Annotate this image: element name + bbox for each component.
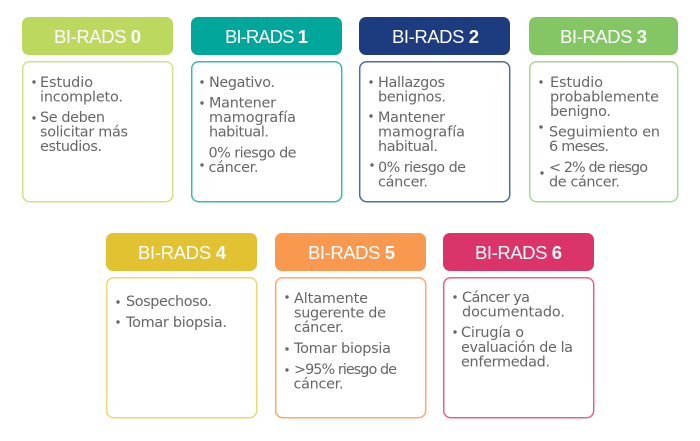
list: BI-RADS 1: mamografía (209, 110, 296, 126)
card: BI-RADS 0 (22, 17, 173, 202)
list: BI-RADS 3: Estudio (550, 75, 603, 91)
list: BI-RADS 6 (453, 290, 573, 370)
list: BI-RADS 3: probablemente (550, 90, 659, 106)
list: BI-RADS 1: Mantener (209, 96, 276, 112)
list: BI-RADS 0: Estudio (40, 75, 93, 91)
list: BI-RADS 1: habitual. (209, 124, 269, 140)
panel: BI-RADS 6 body (444, 278, 594, 418)
list: BI-RADS 3: < 2% de riesgo (549, 160, 648, 176)
header: BI-RADS 1: BI-RADS 1 (225, 26, 308, 47)
list: BI-RADS 5: cáncer. (294, 376, 344, 392)
list: BI-RADS 0: estudios. (40, 139, 102, 155)
panel: BI-RADS 5 body (276, 278, 426, 418)
list: BI-RADS 2: Mantener (378, 110, 445, 126)
list: BI-RADS 5: sugerente de (294, 306, 386, 322)
list: BI-RADS 3: de cáncer. (549, 174, 620, 190)
header: BI-RADS 4: BI-RADS 4 (138, 242, 227, 263)
list: BI-RADS 4: Sospechoso. (126, 294, 212, 310)
list: BI-RADS 2: Hallazgos (378, 75, 445, 91)
list: BI-RADS 6: enfermedad. (461, 354, 550, 370)
list: BI-RADS 2: 0% riesgo de (378, 160, 466, 176)
card: BI-RADS 3 (529, 17, 678, 202)
panel: BI-RADS 3 body (530, 62, 678, 202)
header: BI-RADS 6: BI-RADS 6 (475, 242, 562, 263)
panel: BI-RADS 1 body (192, 62, 342, 202)
list: BI-RADS 6: evaluación de la (461, 340, 573, 356)
list: BI-RADS 0: incompleto. (40, 90, 123, 106)
card: BI-RADS 2 (359, 17, 510, 202)
panel: BI-RADS 2 body (360, 62, 510, 202)
header: BI-RADS 6 (443, 233, 594, 271)
list: BI-RADS 5: Altamente (294, 291, 368, 307)
header: BI-RADS 4 (106, 233, 257, 271)
panel: BI-RADS 4 body (107, 278, 257, 418)
list: BI-RADS 0: solicitar más (40, 124, 128, 140)
panel: BI-RADS 0 body (23, 62, 173, 202)
list: BI-RADS 5: Tomar biopsia (293, 341, 391, 357)
card: BI-RADS 5 (275, 233, 426, 418)
list: BI-RADS 5: cáncer. (294, 320, 344, 336)
header: BI-RADS 1 (191, 17, 342, 55)
header: BI-RADS 3 (529, 17, 678, 55)
header: BI-RADS 2 (359, 17, 510, 55)
header: BI-RADS 5 (275, 233, 426, 271)
list: BI-RADS 5: >95% riesgo de (294, 362, 397, 378)
list: BI-RADS 1: Negativo. (209, 75, 275, 91)
header: BI-RADS 2: BI-RADS 2 (392, 26, 479, 47)
list: BI-RADS 3: Seguimiento en (549, 124, 660, 140)
list: BI-RADS 2: mamografía (378, 124, 465, 140)
list: BI-RADS 0: Se deben (40, 110, 105, 126)
list: BI-RADS 2: habitual. (378, 139, 438, 155)
list: BI-RADS 6: Cirugía o (461, 325, 524, 341)
list: BI-RADS 1: cáncer. (208, 160, 258, 176)
header: BI-RADS 0 (22, 17, 173, 55)
list: BI-RADS 2: benignos. (378, 90, 446, 106)
list: BI-RADS 6: Cáncer ya (462, 290, 530, 306)
list: BI-RADS 5 (285, 291, 397, 392)
header: BI-RADS 3: BI-RADS 3 (560, 26, 647, 47)
card: BI-RADS 6 (443, 233, 594, 418)
list: BI-RADS 1: 0% riesgo de (208, 146, 297, 162)
list: BI-RADS 4: Tomar biopsia. (125, 315, 227, 331)
list: BI-RADS 2: cáncer. (378, 174, 428, 190)
list: BI-RADS 0 (32, 75, 128, 155)
header: BI-RADS 5: BI-RADS 5 (308, 242, 395, 263)
header: BI-RADS 0: BI-RADS 0 (54, 26, 141, 47)
list: BI-RADS 3 (539, 75, 660, 190)
list: BI-RADS 3: benigno. (550, 104, 611, 120)
card: BI-RADS 1 (191, 17, 342, 202)
card: BI-RADS 4 (106, 233, 257, 418)
list: BI-RADS 3: 6 meses. (549, 139, 609, 155)
list: BI-RADS 6: documentado. (462, 304, 565, 320)
list: BI-RADS 1 (200, 75, 297, 176)
list: BI-RADS 2 (369, 75, 466, 190)
list: BI-RADS 4 (116, 294, 227, 331)
